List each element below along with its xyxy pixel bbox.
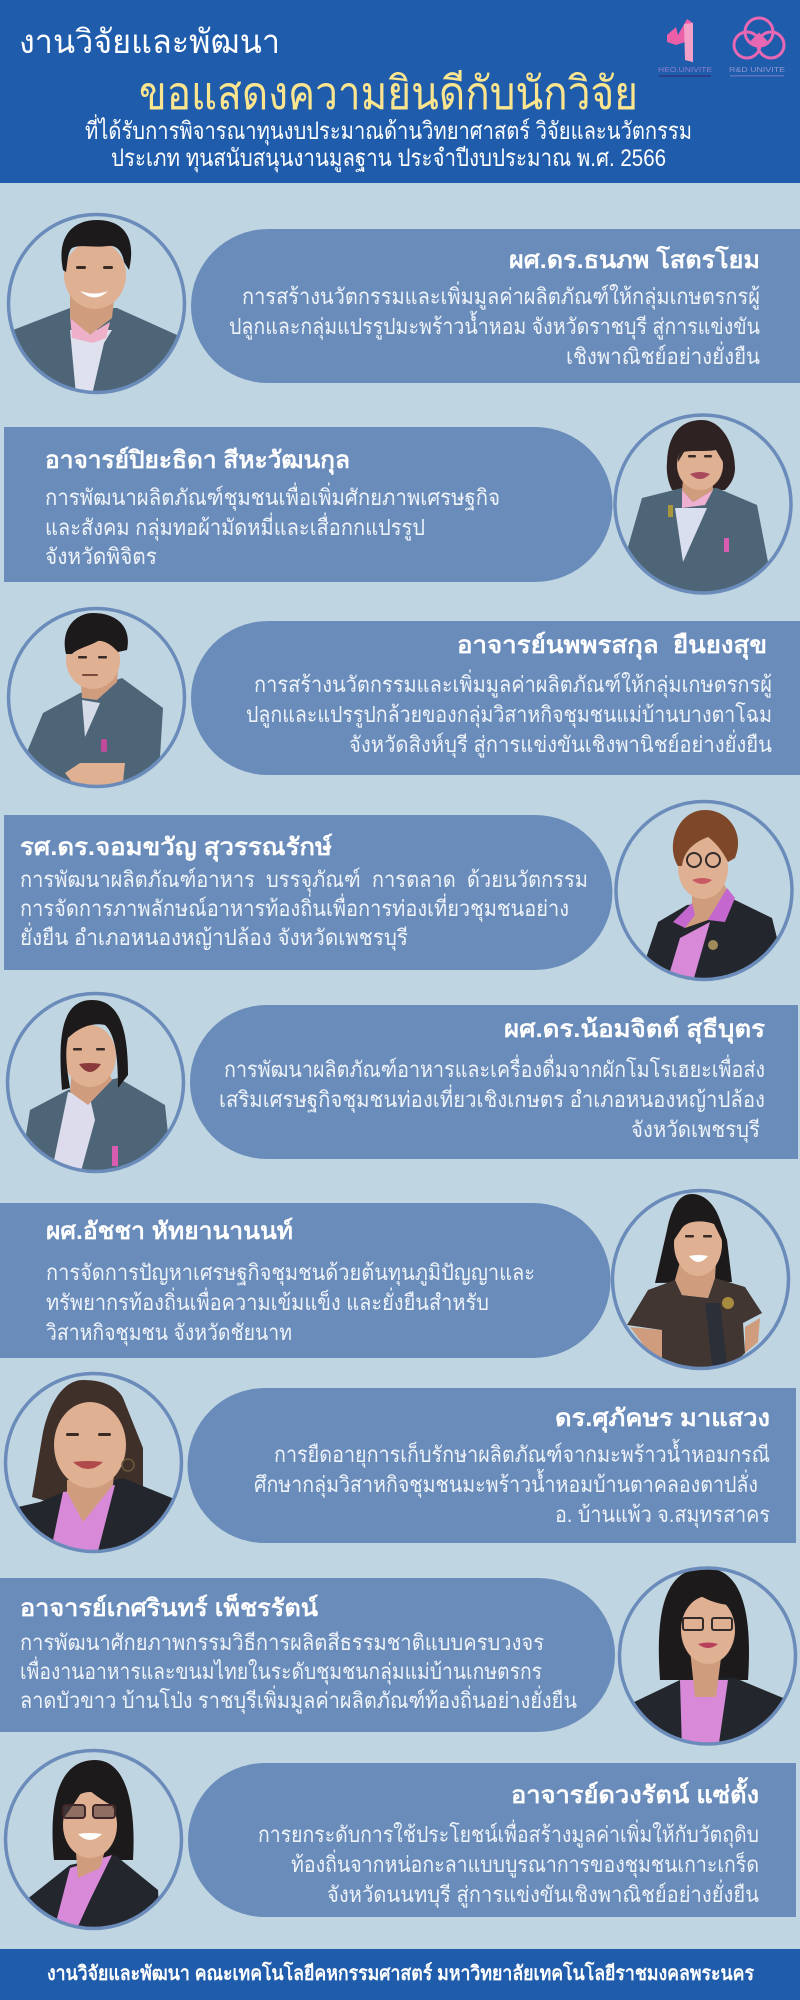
description 2: และสังคม กลุ่มทอผ้ามัดหมี่และเสื่อกกแปรรูป <box>45 512 425 541</box>
panel 2 <box>4 427 612 582</box>
description 5: เสริมเศรษฐกิจชุมชนท่องเที่ยวเชิงเกษตร อำเภอหนองหญ้าปล้อง <box>219 1084 765 1113</box>
portrait 1 <box>8 214 184 400</box>
portrait 9 <box>6 1750 182 1935</box>
name 7: ดร.ศุภัคษร มาแสวง <box>555 1405 770 1434</box>
panel 1 <box>191 229 800 383</box>
logo: HEO: HEO.UNIVITE <box>658 67 712 74</box>
portrait 8 <box>620 1568 796 1750</box>
name 4: รศ.ดร.จอมขวัญ สุวรรณรักษ์ <box>20 833 333 863</box>
description 2: จังหวัดพิจิตร <box>45 544 157 569</box>
name 3: อาจารย์นพพรสกุล ยืนยงสุข <box>457 631 767 661</box>
description 2 <box>45 482 500 569</box>
subtitle line 2: ประเภท ทุนสนับสนุนงานมูลฐาน ประจำปีงบประมาณ พ.ศ. 2566 <box>111 145 666 173</box>
portrait 2 <box>615 415 791 600</box>
description 1: เชิงพาณิชย์อย่างยั่งยืน <box>566 341 760 369</box>
description 8 <box>20 1630 577 1714</box>
description 8: เพื่องานอาหารและขนมไทยในระดับชุมชนกลุ่มแม่บ้านเกษตรกร <box>20 1656 542 1685</box>
row 1 <box>8 214 800 400</box>
panel 8 <box>0 1578 615 1732</box>
panel 4 <box>4 815 612 970</box>
row 7 <box>6 1374 796 1560</box>
title: congratulations to researchers: ขอแสดงความยินดีกับนักวิจัย <box>139 67 638 119</box>
row 9 <box>6 1750 796 1935</box>
description 3 <box>246 669 772 758</box>
logo: R&D: R&D UNIVITE <box>729 67 785 74</box>
row 8 <box>0 1568 796 1750</box>
heading: research and development unit: งานวิจัยและพัฒนา <box>19 23 280 60</box>
subtitle line 1: ที่ได้รับการพิจารณาทุนงบประมาณด้านวิทยาศาสตร์ วิจัยและนวัตกรรม <box>85 114 692 146</box>
row 2 <box>4 415 791 600</box>
portrait 4 <box>616 802 792 985</box>
name 9: อาจารย์ดวงรัตน์ แซ่ตั้ง <box>511 1776 759 1809</box>
description 9 <box>258 1819 759 1908</box>
description 2: การพัฒนาผลิตภัณฑ์ชุมชนเพื่อเพิ่มศักยภาพเศรษฐกิจ <box>45 482 500 511</box>
row 3 <box>8 608 800 790</box>
description 6: การจัดการปัญหาเศรษฐกิจชุมชนด้วยต้นทุนภูมิปัญญาและ <box>46 1260 535 1286</box>
logo: R&D <box>729 18 785 76</box>
panel 7 <box>187 1388 796 1543</box>
description 6: วิสาหกิจชุมชน จังหวัดชัยนาท <box>45 1320 292 1346</box>
description 4: การจัดการภาพลักษณ์อาหารท้องถิ่นเพื่อการท่องเที่ยวชุมชนอย่าง <box>20 893 569 922</box>
description 8: ลาดบัวขาว บ้านโป่ง ราชบุรีเพิ่มมูลค่าผลิตภัณฑ์ท้องถิ่นอย่างยั่งยืน <box>20 1685 577 1714</box>
row 5 <box>8 994 798 1175</box>
name 1: ผศ.ดร.ธนภพ โสตรโยม <box>509 245 760 274</box>
row 6 <box>0 1190 788 1375</box>
description 1: การสร้างนวัตกรรมและเพิ่มมูลค่าผลิตภัณฑ์ให้กลุ่มเกษตรกรผู้ <box>242 281 760 310</box>
panel 9 <box>188 1763 796 1917</box>
description 4 <box>20 867 588 951</box>
portrait 6 <box>612 1190 788 1375</box>
description 6: ทรัพยากรท้องถิ่นเพื่อความเข้มแข็ง และยั่งยืนสำหรับ <box>46 1287 489 1315</box>
header banner <box>0 0 800 183</box>
description 4: ยั่งยืน อำเภอหนองหญ้าปล้อง จังหวัดเพชรบุรี <box>20 922 408 951</box>
panel 5 <box>190 1005 798 1159</box>
logo: HEO <box>658 19 712 77</box>
description 4: การพัฒนาผลิตภัณฑ์อาหาร บรรจุภัณฑ์ การตลาด ด้วยนวัตกรรม <box>20 867 588 893</box>
row 4 <box>4 802 792 985</box>
description 7: อ. บ้านแพ้ว จ.สมุทรสาคร <box>555 1502 770 1528</box>
name 6: ผศ.อัชชา หัทยานานนท์ <box>46 1217 293 1245</box>
description 5: จังหวัดเพชรบุรี <box>631 1117 760 1143</box>
name 8: อาจารย์เกศรินทร์ เพ็ชรรัตน์ <box>20 1593 319 1622</box>
portrait 3 <box>8 608 184 790</box>
portrait 5 <box>8 994 184 1175</box>
description 6 <box>45 1260 535 1346</box>
name 5: ผศ.ดร.น้อมจิตต์ สุธีบุตร <box>504 1015 765 1045</box>
description 5 <box>219 1054 765 1143</box>
description 9: จังหวัดนนทบุรี สู่การแข่งขันเชิงพาณิชย์อย่างยั่งยืน <box>327 1879 759 1908</box>
description 7 <box>254 1439 770 1528</box>
description 8: การพัฒนาศักยภาพกรรมวิธีการผลิตสีธรรมชาติแบบครบวงจร <box>20 1630 544 1655</box>
description 1 <box>229 281 760 369</box>
footer band <box>0 1949 800 2000</box>
panel 6 <box>0 1203 610 1358</box>
name 2: อาจารย์ปิยะธิดา สีหะวัฒนกุล <box>45 446 350 476</box>
portrait 7 <box>6 1374 182 1560</box>
description 3: จังหวัดสิงห์บุรี สู่การแข่งขันเชิงพานิชย์อย่างยั่งยืน <box>349 729 772 758</box>
panel 3 <box>191 621 800 775</box>
